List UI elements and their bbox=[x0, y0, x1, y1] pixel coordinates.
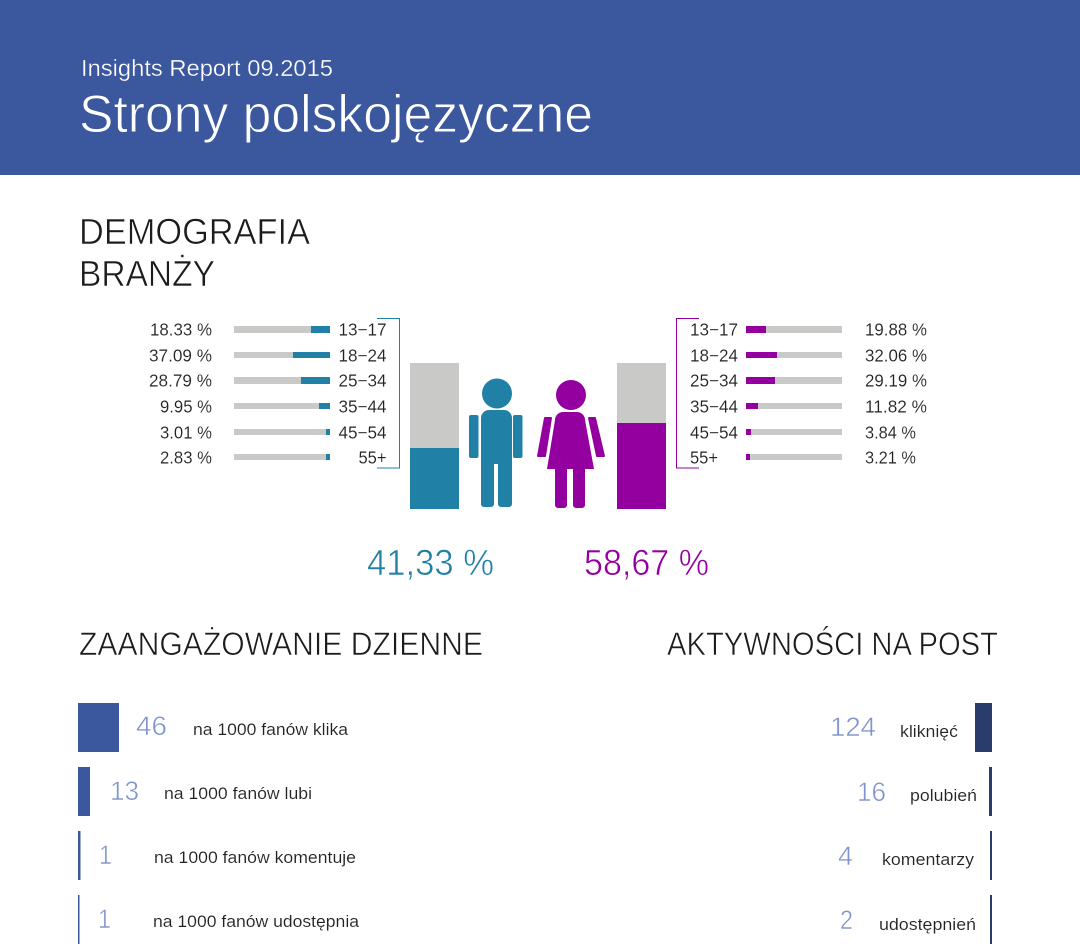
row: comments per post bbox=[838, 831, 992, 880]
heading: zaangażowanie dzienne: ZAANGAŻOWANIE DZIENNE bbox=[79, 626, 483, 662]
row: comments: na 1000 fanów komentuje bbox=[154, 848, 356, 867]
panel: male age distribution: 37.09 % bbox=[149, 346, 212, 366]
row: likes per post: 16 bbox=[857, 777, 886, 807]
panel: female age distribution: 55+ bbox=[690, 448, 718, 468]
row: shares per post: udostępnień bbox=[879, 915, 976, 934]
panel: female age distribution: 3.21 % bbox=[865, 448, 916, 468]
panel: male age distribution: 9.95 % bbox=[160, 396, 212, 416]
icon: man bbox=[469, 378, 522, 507]
row: clicks per post bbox=[830, 703, 992, 752]
row: comments per post: komentarzy bbox=[882, 850, 975, 869]
panel: male age distribution: 18−24 bbox=[338, 346, 387, 366]
panel: male age distribution bbox=[149, 318, 400, 468]
row: likes bbox=[78, 767, 312, 816]
panel: male age distribution: 13−17 bbox=[338, 320, 386, 340]
panel: female age distribution: 3.84 % bbox=[865, 422, 916, 442]
row: shares: na 1000 fanów udostępnia bbox=[153, 912, 360, 931]
row: comments per post: 4 bbox=[838, 841, 853, 871]
panel: female age distribution: 19.88 % bbox=[865, 320, 927, 340]
row: shares: 1 bbox=[98, 904, 111, 934]
row: comments bbox=[78, 831, 356, 880]
row: clicks: 46 bbox=[136, 711, 167, 741]
panel: male age distribution: 45−54 bbox=[338, 422, 387, 442]
heading: demografia branży: DEMOGRAFIA bbox=[79, 211, 310, 252]
panel: male age distribution: 28.79 % bbox=[149, 370, 212, 390]
panel: male age distribution: 2.83 % bbox=[160, 448, 212, 468]
panel: activity per post rows bbox=[830, 703, 992, 944]
female share column bbox=[617, 363, 666, 509]
row: clicks per post: 124 bbox=[830, 712, 876, 742]
row: clicks: na 1000 fanów klika bbox=[193, 720, 349, 739]
row: likes: na 1000 fanów lubi bbox=[164, 784, 312, 803]
panel: daily engagement rows bbox=[78, 703, 360, 944]
panel: female age distribution: 32.06 % bbox=[865, 346, 927, 366]
heading: demografia branży bbox=[79, 211, 310, 294]
row: comments: 1 bbox=[99, 840, 112, 870]
heading: aktywności na post: AKTYWNOŚCI NA POST bbox=[667, 626, 998, 662]
row: clicks bbox=[78, 703, 349, 752]
male share column bbox=[410, 363, 459, 509]
panel: male age distribution: 55+ bbox=[358, 448, 386, 468]
female percentage: 58,67 % bbox=[584, 542, 709, 583]
row: shares per post: 2 bbox=[840, 905, 853, 935]
panel: male age distribution: 3.01 % bbox=[160, 422, 212, 442]
header banner bbox=[0, 0, 1080, 175]
main title: Strony polskojęzyczne bbox=[79, 85, 593, 144]
row: shares bbox=[78, 895, 360, 944]
panel: female age distribution: 35−44 bbox=[690, 396, 738, 416]
row: likes: 13 bbox=[110, 776, 139, 806]
row: shares per post bbox=[840, 895, 992, 944]
panel: female age distribution: 13−17 bbox=[690, 320, 738, 340]
row: clicks per post: kliknięć bbox=[900, 722, 959, 741]
panel: female age distribution: 45−54 bbox=[690, 422, 738, 442]
panel: female age distribution bbox=[676, 318, 927, 468]
male percentage: 41,33 % bbox=[367, 542, 494, 583]
row: likes per post bbox=[857, 767, 992, 816]
panel: female age distribution: 11.82 % bbox=[865, 396, 927, 416]
panel: male age distribution: 35−44 bbox=[338, 396, 387, 416]
heading: demografia branży: BRANŻY bbox=[79, 253, 215, 294]
panel: female age distribution: 29.19 % bbox=[865, 370, 927, 390]
row: likes per post: polubień bbox=[910, 786, 977, 805]
icon: woman bbox=[537, 380, 605, 508]
report subtitle: Insights Report 09.2015 bbox=[81, 55, 333, 81]
panel: female age distribution: 18−24 bbox=[690, 346, 738, 366]
panel: male age distribution: 25−34 bbox=[338, 370, 387, 390]
panel: male age distribution: 18.33 % bbox=[150, 320, 212, 340]
panel: female age distribution: 25−34 bbox=[690, 370, 738, 390]
